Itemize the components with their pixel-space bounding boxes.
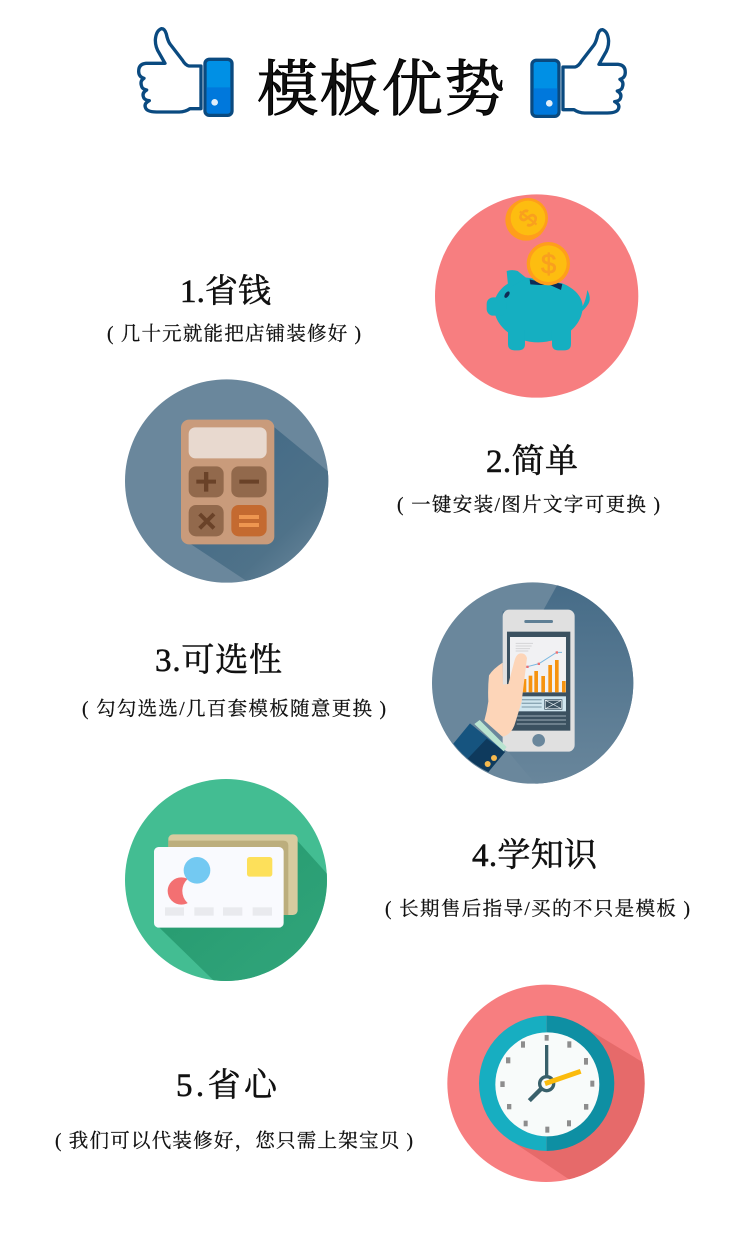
item 1 description: ( 几十元就能把店铺装修好 ) [107, 323, 361, 345]
icon: left thumbs up [139, 29, 232, 115]
item 5 heading: 5.省心 [176, 1067, 279, 1104]
clock hands [529, 1045, 581, 1101]
icon: piggy bank with coins [435, 194, 638, 398]
item 2 description: ( 一键安装/图片文字可更换 ) [397, 494, 660, 516]
coin: lower: $ [541, 248, 556, 279]
clock ticks [500, 1035, 594, 1133]
icon: phone with chart in hand [432, 578, 638, 791]
item 5 description: ( 我们可以代装修好，您只需上架宝贝 ) [55, 1130, 413, 1152]
item 2 heading: 2.简单 [486, 443, 578, 480]
title: 模板优势 [257, 57, 505, 124]
sleeve [453, 723, 505, 772]
item 1 heading: 1.省钱 [180, 273, 271, 310]
icon: clock [447, 985, 653, 1193]
cuff [474, 720, 507, 751]
icon: right thumbs up [532, 30, 625, 116]
icon: cards [125, 779, 333, 988]
item 4 heading: 4.学知识 [472, 837, 598, 874]
item 4 description: ( 长期售后指导/买的不只是模板 ) [385, 898, 690, 920]
hand [484, 653, 527, 737]
item 3 description: ( 勾勾选选/几百套模板随意更换 ) [82, 698, 386, 720]
coin: upper: $ [513, 204, 544, 233]
icon: calculator [125, 379, 333, 588]
item 3 heading: 3.可选性 [155, 642, 282, 679]
coin: upper [505, 198, 548, 241]
coin: lower [527, 242, 570, 285]
bars [523, 660, 566, 692]
